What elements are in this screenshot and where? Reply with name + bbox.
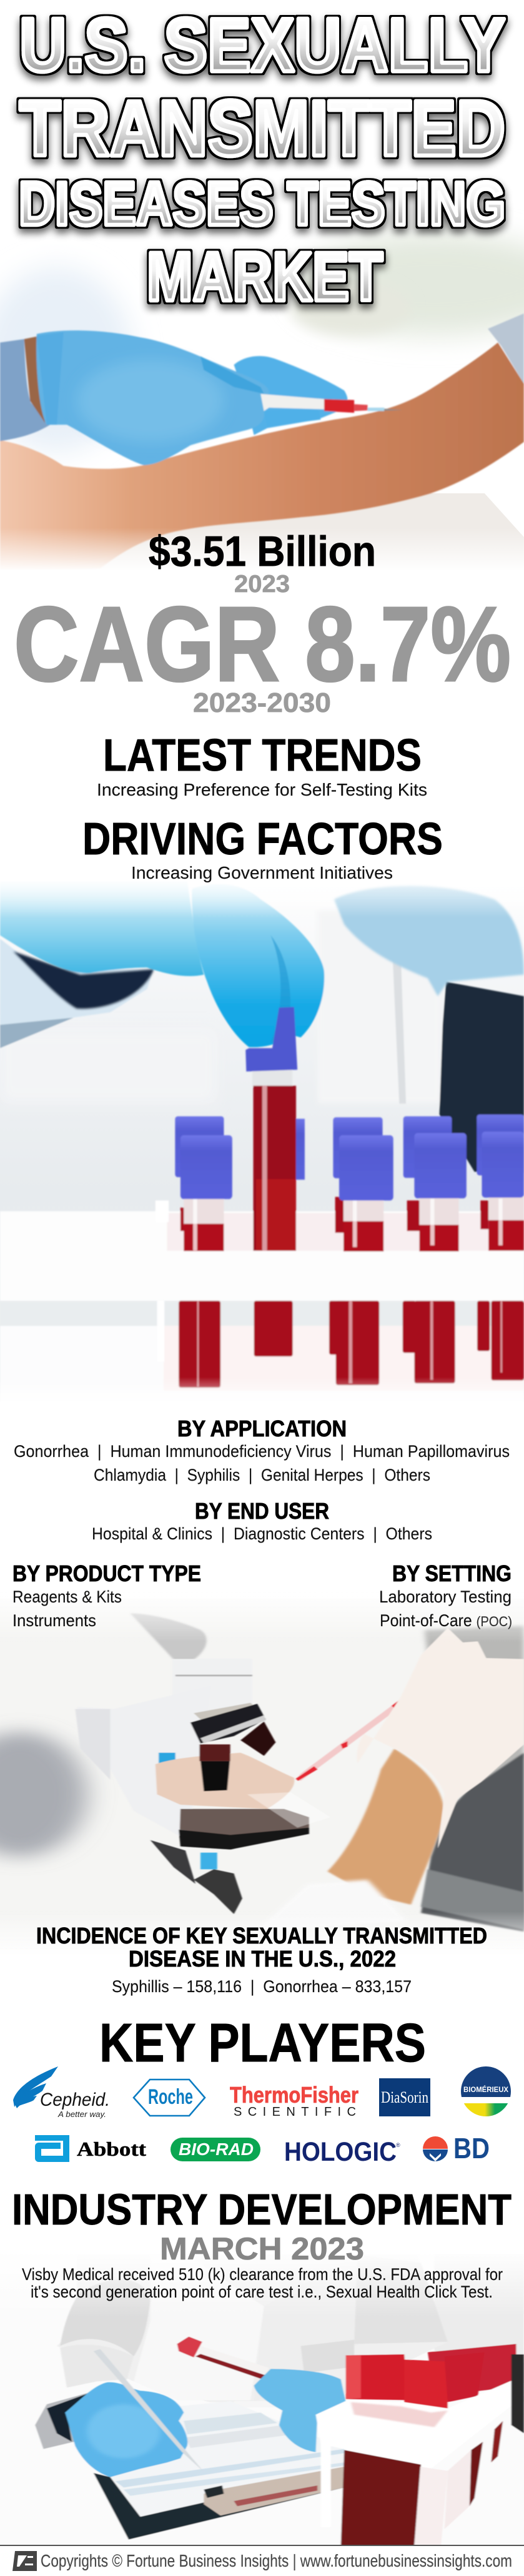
- latest trends text: Increasing Preference for Self-Testing Kits: [97, 780, 427, 799]
- logo: DiaSorin: [379, 2078, 430, 2116]
- test tube: [197, 2346, 269, 2379]
- logo: DiaSorin: DiaSorin: [381, 2088, 428, 2106]
- below-rack tubes: [179, 1301, 524, 1388]
- key players heading: KEY PLAYERS: [99, 2013, 426, 2073]
- logo: Roche: Roche: [148, 2085, 193, 2109]
- icon: Fortune Business Insights logo: [12, 2551, 37, 2571]
- logo: Cepheid: A better way.: [57, 2110, 106, 2119]
- title: [19, 2, 505, 315]
- latest trends heading: LATEST TRENDS: [103, 731, 422, 781]
- logo: Cepheid: Cepheid.: [40, 2090, 110, 2110]
- back row caps: [175, 1115, 524, 1180]
- logo: bioMerieux: [461, 2066, 511, 2116]
- hero photo: gloved hands drawing blood from arm: [0, 233, 524, 589]
- CAGR period: 2023-2030: [193, 688, 331, 718]
- by application heading: BY APPLICATION: [177, 1416, 347, 1441]
- driving factors text: Increasing Government Initiatives: [131, 863, 393, 882]
- by setting heading: BY SETTING: [392, 1561, 512, 1586]
- logo: bioMerieux: BIOMÉRIEUX: [463, 2085, 508, 2094]
- logo: Hologic: ®: [396, 2142, 400, 2148]
- top fade of doctor photo: [0, 2248, 524, 2317]
- product type: instruments: Instruments: [12, 1611, 96, 1630]
- logo: BD: BD: [453, 2132, 490, 2164]
- front tubes: [184, 1197, 524, 1226]
- by product type heading: BY PRODUCT TYPE: [12, 1561, 201, 1586]
- front caps: [180, 1132, 524, 1200]
- top fade of microscope photo: [0, 1586, 524, 1642]
- bottom fade of microscope photo: [0, 1911, 524, 1958]
- by end user items: Hospital & Clinics | Diagnostic Centers | Others: [92, 1524, 432, 1543]
- logo: BD: [423, 2132, 490, 2164]
- logo: Thermo Fisher Scientific: [230, 2082, 358, 2119]
- photo: microscope with gloved hands: [0, 1599, 524, 1957]
- raised tube: [252, 1070, 292, 1087]
- footer rule: [0, 2545, 524, 2546]
- logo: Bio-Rad: [171, 2138, 260, 2161]
- footer panel: [0, 2545, 524, 2576]
- photo: doctor with STD test tube and clipboard: [0, 2254, 524, 2546]
- logo: Roche: [134, 2080, 205, 2116]
- photo: blood sample tubes in rack: [0, 874, 524, 1401]
- market size year: 2023: [234, 571, 290, 598]
- clipboard: [94, 2471, 344, 2540]
- by application items line 2: Chlamydia | Syphilis | Genital Herpes | Others: [94, 1466, 430, 1484]
- pen: [94, 2349, 204, 2472]
- back row tubes: [180, 1197, 488, 1233]
- setting: laboratory: Laboratory Testing: [379, 1587, 512, 1606]
- logo: Hologic: HOLOGIC: [284, 2137, 397, 2167]
- product type: reagents: Reagents & Kits: [12, 1587, 122, 1606]
- logo: Abbott: Abbott: [77, 2138, 146, 2160]
- title: MARKET: [147, 239, 383, 315]
- incidence figures: Syphillis – 158,116 | Gonorrhea – 833,157: [112, 1977, 412, 1996]
- incidence heading line 2: DISEASE IN THE U.S., 2022: [129, 1946, 396, 1971]
- industry development date: MARCH 2023: [160, 2231, 364, 2266]
- setting: point of care: Point-of-Care (POC): [380, 1611, 512, 1630]
- driving factors heading: DRIVING FACTORS: [82, 814, 443, 864]
- left glove and sleeve: [35, 2392, 92, 2449]
- logo: Abbott: [35, 2135, 146, 2162]
- logo: Bio-Rad: BIO-RAD: [179, 2139, 254, 2159]
- top fade of tube photo: [0, 871, 524, 918]
- hero bottom fade: [0, 528, 524, 571]
- by end user heading: BY END USER: [195, 1498, 329, 1524]
- rack and tubes: [428, 2344, 517, 2396]
- logo: Thermo Fisher Scientific: ThermoFisher: [230, 2082, 358, 2108]
- logo: Cepheid: [13, 2066, 110, 2119]
- market size value: $3.51 Billion: [149, 528, 376, 575]
- logo: Thermo Fisher Scientific: SCIENTIFIC: [234, 2105, 356, 2119]
- right glove: [254, 2369, 346, 2452]
- bottom fade of tube photo: [0, 1377, 524, 1408]
